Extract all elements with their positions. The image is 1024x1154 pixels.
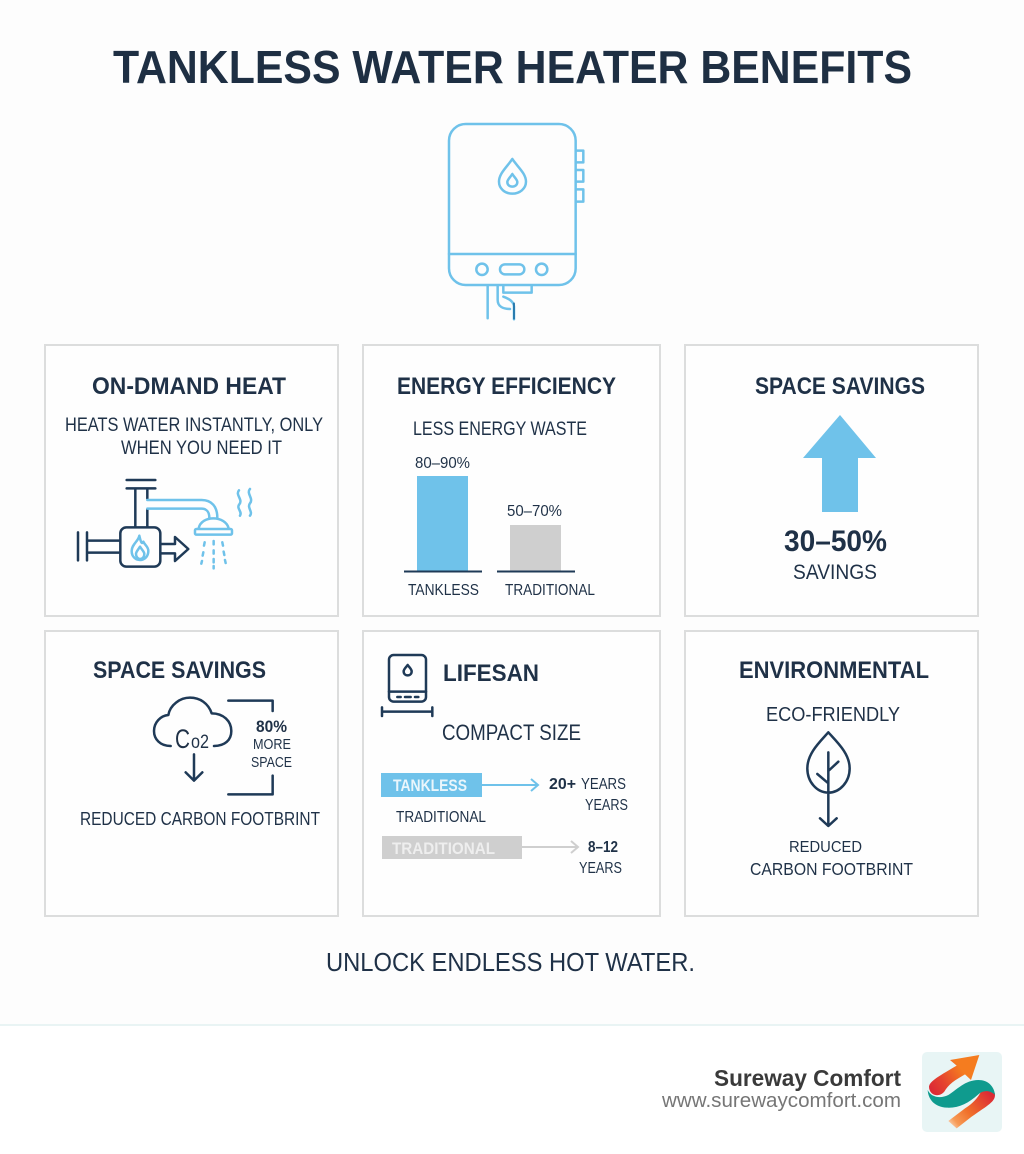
bar: tankless lifespan: YEARS	[581, 776, 626, 793]
callout: 80% more space	[228, 701, 292, 794]
icon: co2 cloud	[154, 698, 231, 781]
text: reduced carbon footprint: REDUCED CARBON FOOTBRINT	[80, 808, 320, 829]
bar chart: efficiency comparison: TANKLESS	[408, 582, 479, 599]
heading: lifespan: LIFESAN	[443, 660, 539, 687]
text: compact size: COMPACT SIZE	[442, 720, 581, 745]
text: eco-friendly: ECO-FRIENDLY	[766, 704, 900, 726]
panel: space savings	[685, 345, 978, 616]
title: TANKLESS WATER HEATER BENEFITS	[113, 41, 912, 93]
bar chart: efficiency comparison: 80–90%	[415, 455, 470, 472]
icon: leaf with arrow	[807, 732, 850, 826]
heading: environmental: ENVIRONMENTAL	[739, 657, 929, 684]
bar chart: efficiency comparison: 50–70%	[507, 503, 562, 520]
bar: traditional lifespan	[382, 836, 622, 877]
panel: lifespan	[363, 631, 660, 916]
text: traditional label: TRADITIONAL	[396, 809, 486, 826]
text: reduced carbon footprint	[750, 839, 913, 879]
text: description: HEATS WATER INSTANTLY, ONLY	[65, 414, 323, 436]
icon: tankless water heater	[449, 124, 583, 319]
text: reduced carbon footprint: CARBON FOOTBRINT	[750, 859, 913, 879]
footer brand text: www.surewaycomfort.com	[661, 1090, 901, 1112]
icon: up arrow	[803, 415, 876, 512]
text: description	[65, 414, 323, 459]
icon: water pipes and shower	[78, 480, 251, 568]
bar: traditional lifespan: YEARS	[579, 860, 622, 877]
heading: space savings: SPACE SAVINGS	[755, 373, 925, 400]
text: reduced carbon footprint: REDUCED	[789, 839, 862, 856]
bar: tankless lifespan: YEARS	[585, 797, 628, 814]
text: less energy waste: LESS ENERGY WASTE	[413, 418, 587, 440]
callout: 80% more space: 80%	[256, 717, 287, 736]
stat: 30-50% savings: 30–50%	[784, 525, 887, 558]
icon: co2 cloud: o2	[191, 732, 209, 753]
footer brand text: Sureway Comfort	[714, 1065, 901, 1091]
bar chart: efficiency comparison	[404, 455, 595, 599]
heading: space savings: SPACE SAVINGS	[93, 657, 266, 684]
panel: space savings carbon	[45, 631, 338, 916]
bar: traditional lifespan: 8–12	[588, 839, 618, 856]
bar: tankless lifespan: TANKLESS	[393, 776, 467, 795]
panel: on-demand heat	[45, 345, 338, 616]
icon: compact heater	[382, 655, 432, 716]
icon: company logo	[922, 1052, 1002, 1132]
panel: environmental	[685, 631, 978, 916]
footer background	[0, 1026, 1024, 1154]
bar: traditional lifespan: TRADITIONAL	[392, 839, 495, 858]
callout: 80% more space: SPACE	[251, 754, 292, 771]
tagline: UNLOCK ENDLESS HOT WATER.	[326, 947, 695, 977]
icon: co2 cloud: C	[175, 724, 190, 754]
bar chart: efficiency comparison: TRADITIONAL	[505, 582, 595, 599]
stat: 30-50% savings: SAVINGS	[793, 561, 877, 584]
callout: 80% more space: MORE	[253, 736, 291, 753]
heading: energy efficiency: ENERGY EFFICIENCY	[397, 373, 616, 400]
bar: tankless lifespan	[381, 773, 628, 814]
heading: on-demand heat: ON-DMAND HEAT	[92, 373, 286, 400]
text: description: WHEN YOU NEED IT	[121, 437, 282, 459]
footer brand text	[661, 1065, 901, 1112]
bar: tankless lifespan: 20+	[549, 776, 576, 793]
stat: 30-50% savings	[784, 525, 887, 584]
panel: energy efficiency	[363, 345, 660, 616]
